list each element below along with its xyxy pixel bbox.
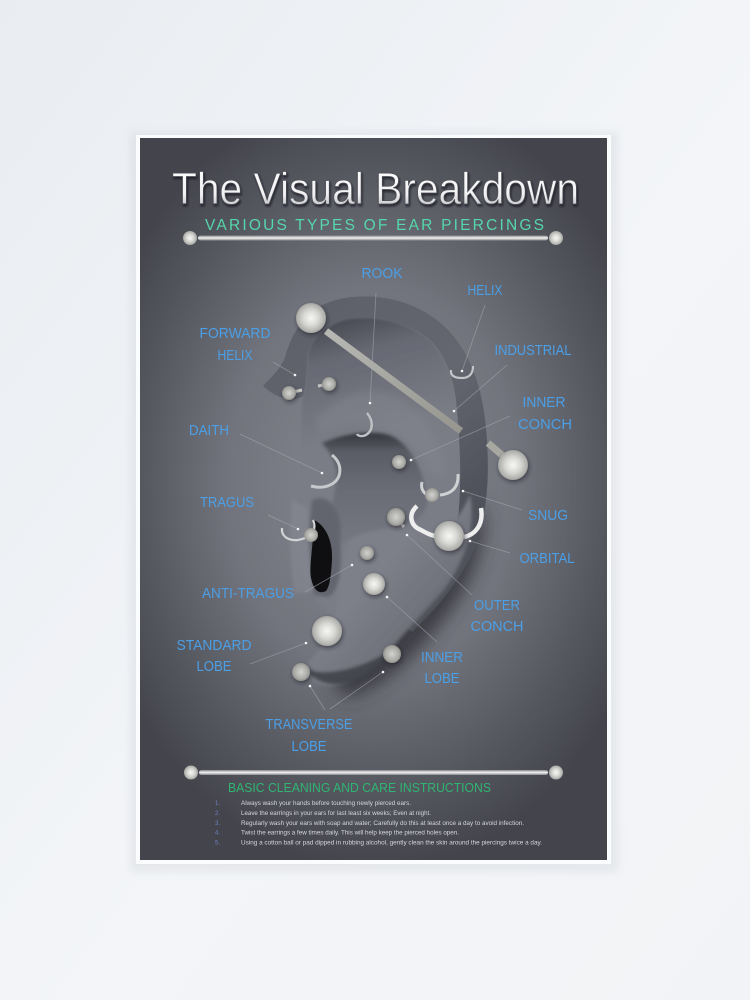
care instructions list: Using a cotton ball or pad dipped in rubbing alcohol, gently clean the skin around the piercings twice a day. bbox=[241, 840, 542, 846]
jewelry: rook ring bbox=[357, 413, 372, 436]
label: snug bbox=[462, 490, 568, 524]
label: inner lobe bbox=[386, 596, 463, 687]
label: industrial bbox=[453, 343, 572, 412]
bottom divider bar bbox=[184, 766, 563, 780]
label: standard lobe: LOBE bbox=[196, 659, 232, 675]
care instructions list: 3. bbox=[215, 821, 220, 827]
jewelry: transverse lobe balls bbox=[292, 645, 401, 681]
care instructions list: 1. bbox=[215, 801, 220, 807]
label: inner conch: INNER bbox=[522, 395, 566, 411]
label: inner lobe: INNER bbox=[421, 650, 463, 666]
ear canal bbox=[310, 520, 332, 592]
label: industrial: INDUSTRIAL bbox=[494, 343, 572, 359]
label: inner lobe: LOBE bbox=[424, 671, 460, 687]
subtitle: VARIOUS TYPES OF EAR PIERCINGS bbox=[205, 217, 544, 234]
title: The Visual Breakdown bbox=[172, 165, 579, 214]
concha bbox=[322, 433, 428, 544]
label: helix: HELIX bbox=[468, 283, 503, 299]
jewelry: anti-tragus ball bbox=[360, 546, 374, 560]
care instructions list: Regularly wash your ears with soap and water; Carefully do this at least once a day to avoid infection. bbox=[241, 821, 524, 827]
label: anti-tragus: ANTI-TRAGUS bbox=[202, 586, 294, 602]
label: outer conch bbox=[406, 534, 524, 635]
jewelry: orbital ring bbox=[411, 506, 482, 551]
label: forward helix bbox=[200, 326, 296, 376]
label: outer conch: OUTER bbox=[474, 598, 520, 614]
tragus soft highlight bbox=[290, 500, 311, 594]
label: transverse lobe: TRANSVERSE bbox=[266, 717, 353, 733]
ear cast shadow bbox=[330, 500, 484, 698]
jewelry: outer conch stud bbox=[387, 508, 405, 527]
care instructions list: Twist the earrings a few times daily. This will help keep the pierced holes open. bbox=[241, 830, 459, 836]
care instructions list: Leave the earrings in your ears for last least six weeks; Even at night. bbox=[241, 811, 431, 817]
care instructions list: Always wash your hands before touching newly pierced ears. bbox=[241, 801, 411, 807]
lobe and lower ear bbox=[306, 495, 472, 686]
label: transverse lobe bbox=[266, 671, 384, 755]
jewelry: daith ring bbox=[311, 455, 340, 487]
label: daith: DAITH bbox=[189, 423, 229, 439]
ear canal surround bbox=[308, 498, 341, 597]
care instructions list: 5. bbox=[215, 840, 220, 846]
jewelry: industrial barbell bbox=[296, 303, 528, 480]
poster panel bbox=[140, 138, 607, 860]
label: transverse lobe: LOBE bbox=[292, 739, 327, 755]
label: standard lobe bbox=[176, 638, 307, 675]
lobe lower dark edge bbox=[306, 648, 394, 684]
ear illustration bbox=[263, 296, 528, 698]
care instructions heading: BASIC CLEANING AND CARE INSTRUCTIONS bbox=[228, 781, 491, 795]
label: orbital bbox=[469, 540, 574, 567]
jewelry: tragus ring bbox=[282, 520, 318, 542]
jewelry: inner lobe ball bbox=[363, 573, 385, 595]
jewelry: inner conch ball bbox=[392, 455, 406, 469]
label: outer conch: CONCH bbox=[470, 619, 524, 635]
label: orbital: ORBITAL bbox=[520, 551, 574, 567]
label: rook bbox=[362, 266, 403, 404]
label: standard lobe: STANDARD bbox=[176, 638, 252, 654]
label: snug: SNUG bbox=[528, 508, 568, 524]
label: inner conch bbox=[410, 395, 572, 461]
jewelry: snug ring bbox=[422, 474, 458, 502]
interior of ear bbox=[298, 317, 461, 625]
care instructions list bbox=[215, 801, 542, 846]
label: helix bbox=[461, 283, 503, 372]
label: inner conch: CONCH bbox=[518, 417, 572, 433]
antihelix highlight bbox=[316, 391, 448, 476]
care instructions list: 2. bbox=[215, 811, 220, 817]
helix rim bbox=[263, 296, 488, 632]
poster bbox=[130, 132, 618, 872]
label: tragus bbox=[200, 495, 299, 530]
care instructions list: 4. bbox=[215, 830, 220, 836]
jewelry: forward helix studs bbox=[282, 377, 336, 400]
label: rook: ROOK bbox=[362, 266, 403, 282]
jewelry: helix ring bbox=[451, 366, 473, 378]
label: forward helix: HELIX bbox=[218, 348, 253, 364]
label: daith bbox=[189, 423, 323, 474]
top divider bar bbox=[183, 231, 563, 245]
jewelry: standard lobe ball bbox=[312, 616, 342, 646]
label: tragus: TRAGUS bbox=[200, 495, 254, 511]
label: anti-tragus bbox=[202, 564, 353, 602]
label: forward helix: FORWARD bbox=[200, 326, 270, 342]
